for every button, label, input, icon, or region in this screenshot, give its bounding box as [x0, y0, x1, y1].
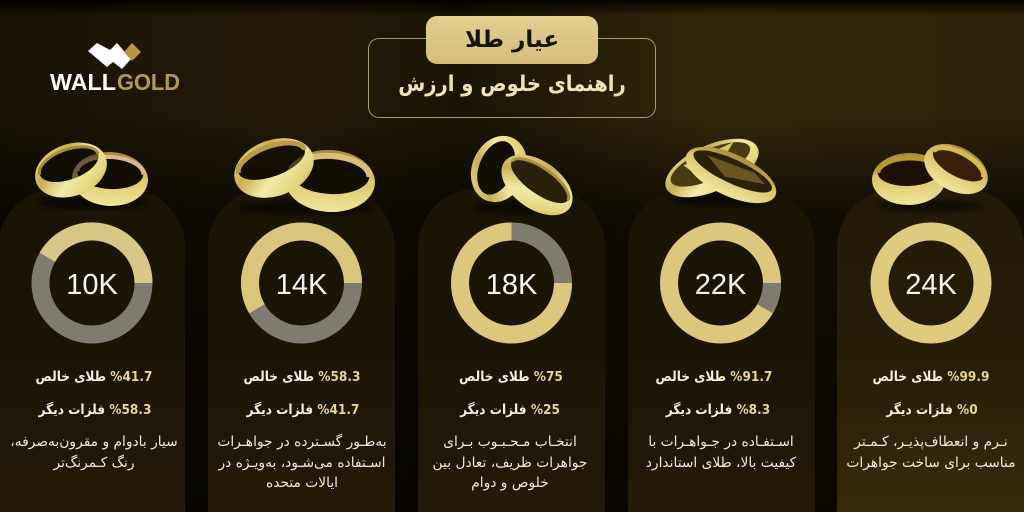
rings: 18K	[461, 127, 584, 228]
panel: 14K	[208, 189, 395, 512]
text: 18K stats: خلوص و دوام	[471, 475, 549, 491]
text: 22K stats: اسـتفـاده در جـواهـرات با	[648, 434, 794, 450]
donut chart: 24K: 24K	[905, 269, 957, 301]
panel: 22K	[628, 189, 815, 512]
text: 18K stats: %25 فلزات دیگر	[460, 402, 560, 418]
panel: 10K	[0, 189, 185, 512]
text: 24K stats: %99.9 طلای خالص	[873, 369, 989, 385]
text: 18K stats: %75 طلای خالص	[459, 369, 563, 385]
text: 24K stats: مناسب برای ساخت جواهرات	[846, 454, 1016, 470]
donut chart: 22K	[669, 232, 772, 334]
donut chart: 10K: 10K	[66, 269, 118, 301]
title badge: عیار طلا	[465, 27, 559, 53]
text: 14K stats: %58.3 طلای خالص	[244, 369, 360, 385]
text: 18K stats: انتخـاب مـحـبـوب بـرای	[443, 434, 577, 450]
text: 10K stats: رنگ کـمرنگ‌تر	[53, 454, 135, 470]
text: 22K stats	[646, 369, 796, 470]
text: 24K stats	[846, 369, 1016, 470]
panel: 24K	[837, 189, 1024, 512]
text: 14K stats: به‌طـور گسـترده در جواهـرات	[217, 434, 387, 450]
text: 10K stats	[10, 369, 178, 470]
text: 24K stats: %0 فلزات دیگر	[886, 402, 978, 418]
rings: 10K	[27, 133, 149, 210]
text: 22K stats: %91.7 طلای خالص	[656, 369, 772, 385]
rings: 14K	[226, 128, 377, 215]
panel: 18K	[418, 189, 605, 512]
text: 18K stats	[433, 369, 587, 491]
donut chart: 18K: 18K	[486, 269, 538, 301]
rings: 24K	[871, 134, 996, 212]
text: 14K stats: اسـتفاده می‌شـود، به‌ویـژه در	[219, 454, 385, 470]
logo: Wall Gold	[50, 43, 180, 94]
text: 22K stats: کیفیت بالا، طلای استاندارد	[646, 454, 796, 470]
rings: 22K	[657, 127, 784, 215]
text: 10K stats: %41.7 طلای خالص	[36, 369, 152, 385]
subtitle: راهنمای خلوص و ارزش	[398, 72, 626, 97]
text: 14K stats: %41.7 فلزات دیگر	[247, 402, 359, 418]
donut chart: 22K: 22K	[695, 269, 747, 301]
donut chart: 14K	[250, 232, 353, 334]
title badge	[426, 16, 598, 64]
text: 18K stats: جواهرات ظریف، تعادل بین	[433, 454, 587, 470]
text: 10K stats: سیار بادوام و مقرون‌به‌صرفه،	[10, 434, 178, 450]
text: 14K stats	[217, 369, 387, 491]
donut chart: 24K	[880, 232, 982, 334]
donut chart: 18K	[460, 232, 563, 334]
text: 24K stats: نـرم و انعطاف‌پذیـر، کـمـتر	[854, 434, 1008, 450]
text: 10K stats: %58.3 فلزات دیگر	[39, 402, 151, 418]
text: 14K stats: ایالات متحده	[266, 475, 338, 491]
donut chart: 14K: 14K	[276, 269, 328, 301]
title block	[368, 16, 656, 118]
text: 22K stats: %8.3 فلزات دیگر	[666, 402, 770, 418]
donut chart: 10K	[40, 231, 144, 334]
subtitle frame	[368, 38, 656, 118]
